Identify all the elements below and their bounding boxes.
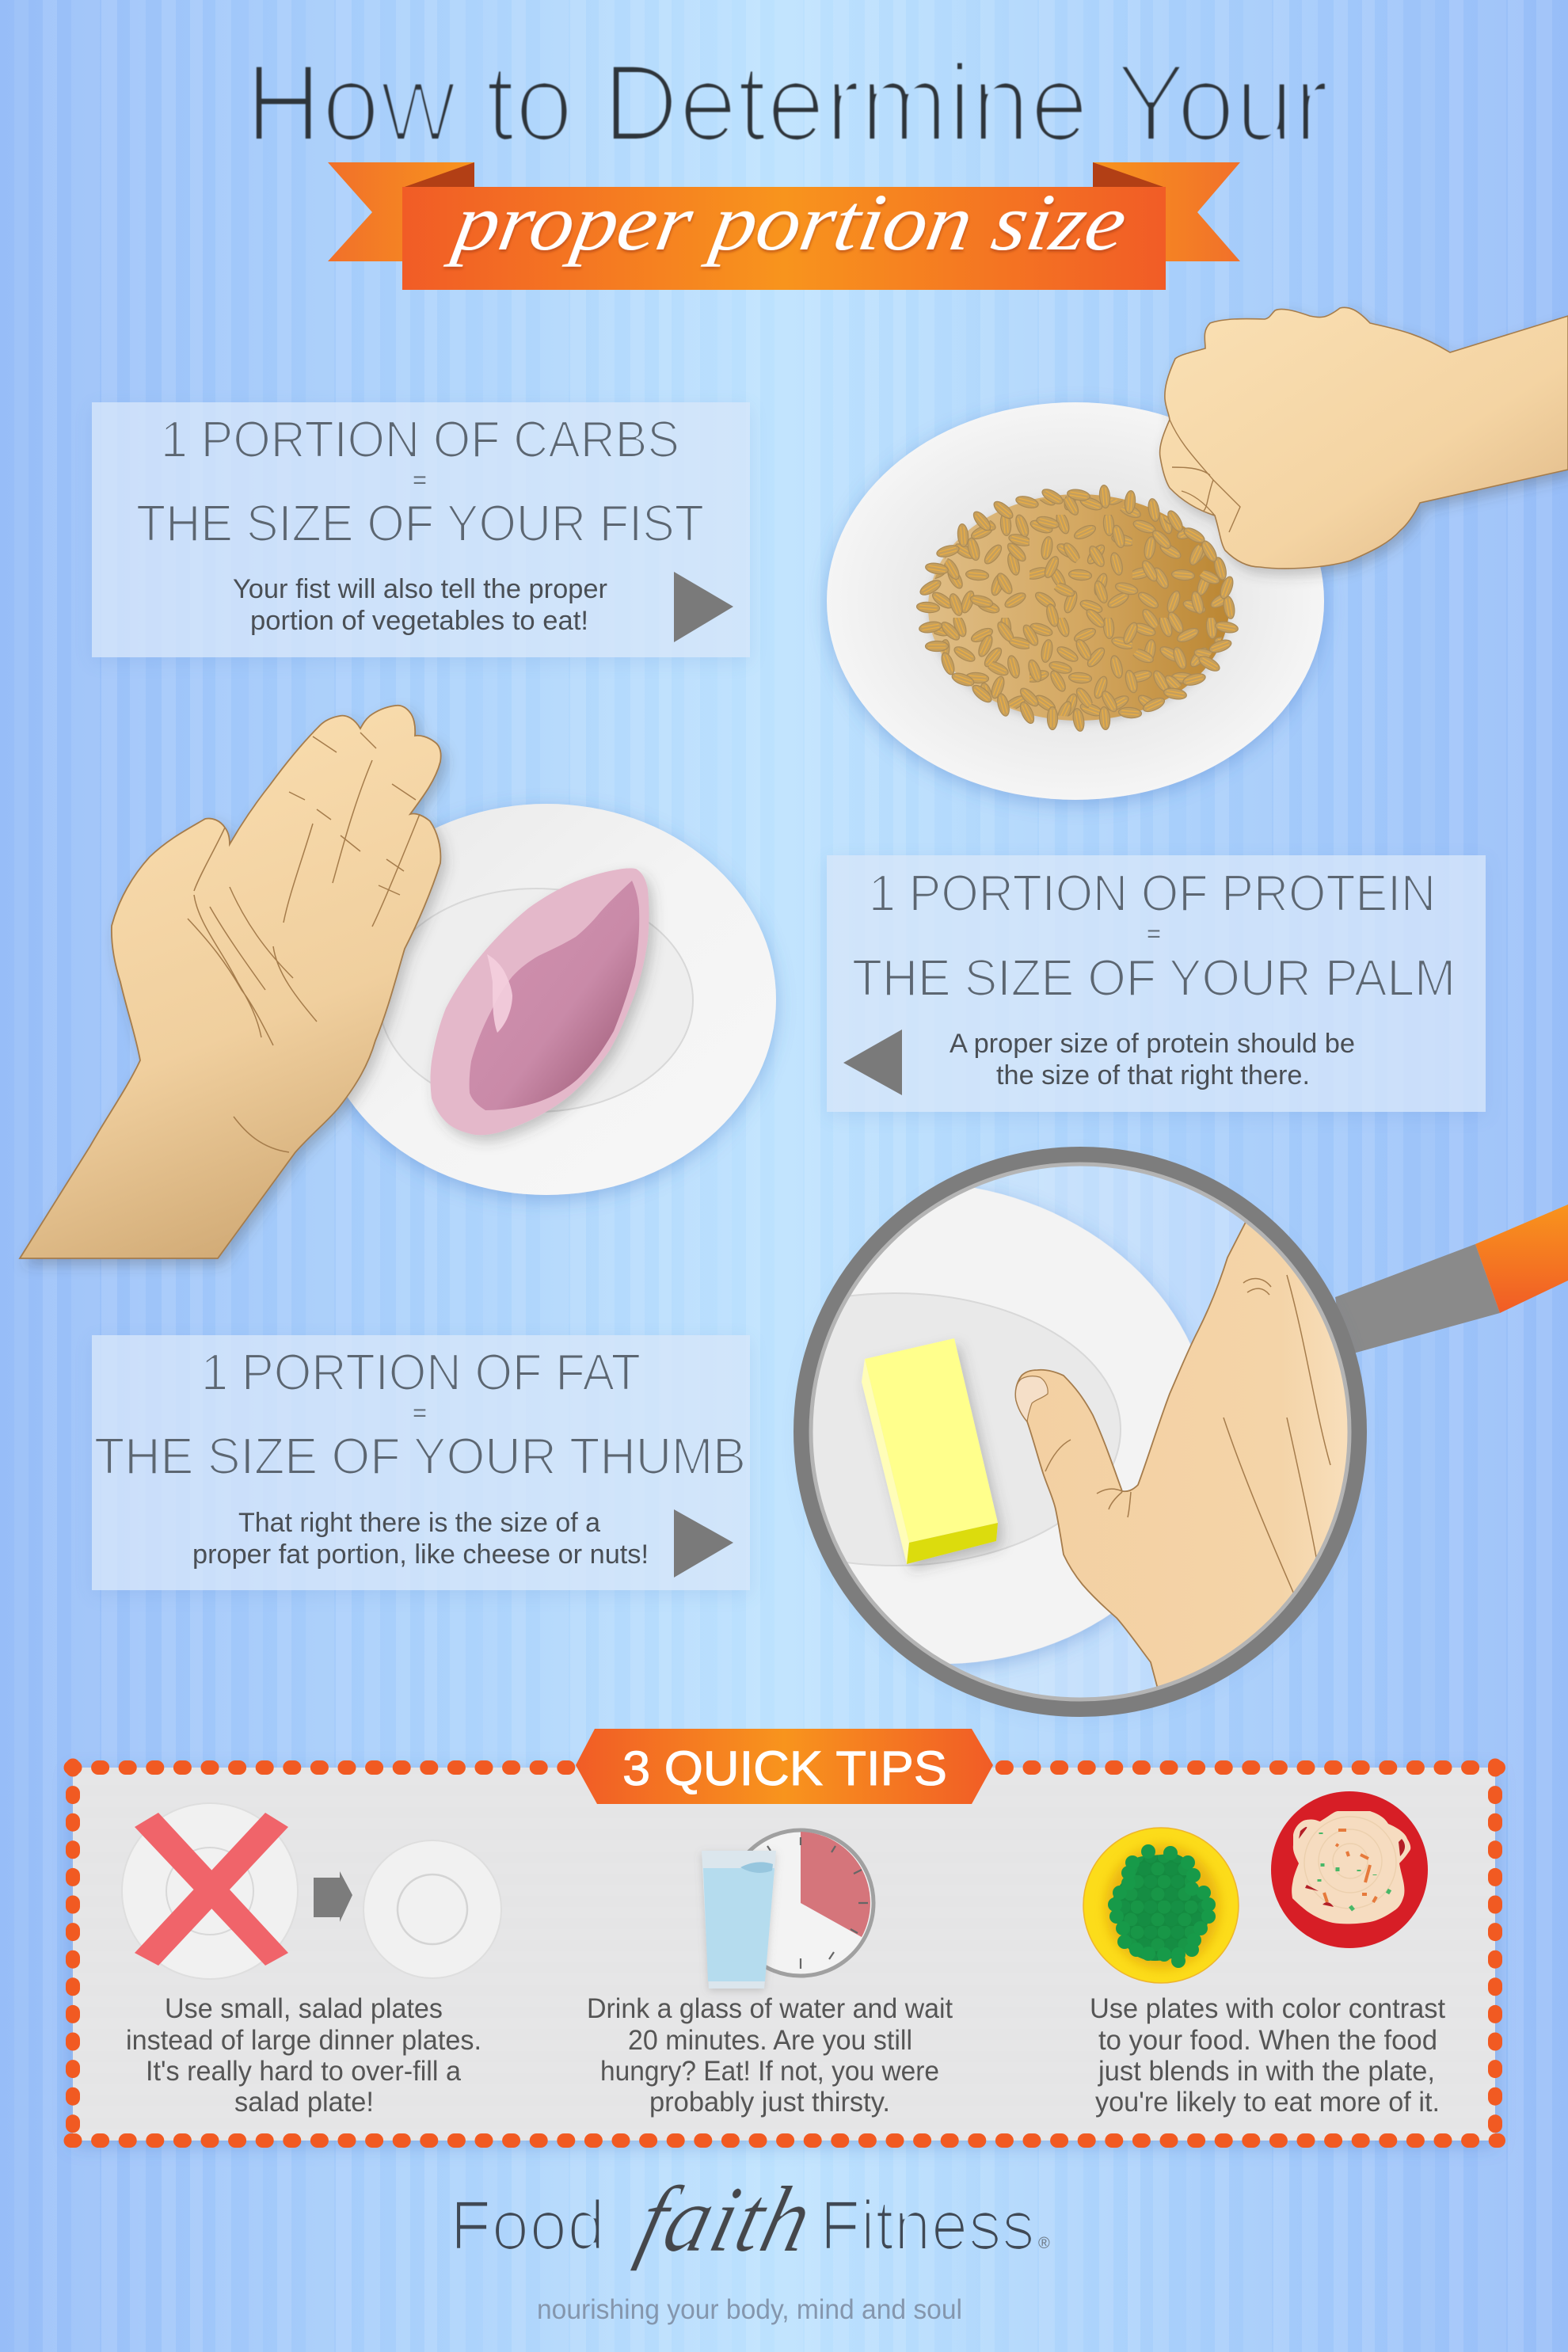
icon: red plate with pasta <box>1271 1791 1428 1948</box>
tip 3: colored plates <box>1083 1791 1445 2118</box>
magnifier handle <box>1335 1205 1568 1356</box>
tips background <box>73 1768 1495 2141</box>
panel: fat: 1 PORTION OF FAT <box>201 1343 641 1401</box>
butter <box>862 1338 998 1564</box>
footer logo: Fitness <box>820 2187 1035 2264</box>
panel: fat: THE SIZE OF YOUR THUMB <box>94 1427 746 1485</box>
hand: palm <box>20 706 441 1258</box>
footer logo: Food <box>450 2187 605 2264</box>
arrow: right <box>674 1509 733 1578</box>
tip 3 text: Use plates with color contrast <box>1090 1993 1445 2024</box>
panel: fat <box>92 1335 750 1590</box>
arrow: to small plate <box>314 1871 352 1922</box>
icon: large plate crossed out <box>122 1803 298 1979</box>
chicken breast <box>431 868 649 1135</box>
tip 2 text: probably just thirsty. <box>649 2087 890 2118</box>
panel: carbs <box>92 402 750 657</box>
panel: carbs: portion of vegetables to eat! <box>250 606 588 636</box>
hand: thumb <box>1015 1223 1348 1687</box>
banner: proper portion size <box>328 162 1240 290</box>
rice mound <box>916 485 1239 732</box>
panel: protein <box>827 855 1486 1112</box>
tip 1: small plates <box>122 1803 501 2118</box>
plate in lens <box>848 1185 1193 1677</box>
plate <box>827 402 1324 800</box>
panel: fat: proper fat portion, like cheese or nuts! <box>192 1539 649 1570</box>
dotted border <box>71 1766 1498 2143</box>
tip 2 text: Drink a glass of water and wait <box>587 1993 953 2024</box>
panel: 3 quick tips <box>71 1729 1498 2143</box>
rice plate <box>827 402 1324 800</box>
panel: carbs: THE SIZE OF YOUR FIST <box>136 494 704 552</box>
hand: fist <box>1160 307 1568 569</box>
title: How to Determine Your <box>245 43 1329 164</box>
magnifier ring <box>801 1155 1359 1709</box>
panel: carbs: = <box>413 467 427 493</box>
tip 2 text <box>587 1993 953 2118</box>
tip 1 text: It's really hard to over-fill a <box>146 2056 462 2087</box>
tip 2 text: hungry? Eat! If not, you were <box>600 2056 939 2087</box>
tagline: nourishing your body, mind and soul <box>537 2294 962 2325</box>
icon: clock <box>728 1830 873 1976</box>
tip 2 text: 20 minutes. Are you still <box>628 2025 912 2056</box>
tips heading tab <box>576 1729 993 1804</box>
arrow: right <box>674 572 733 642</box>
panel: protein: THE SIZE OF YOUR PALM <box>852 949 1456 1007</box>
tip 1 text: salad plate! <box>234 2087 374 2118</box>
tip 3 text: you're likely to eat more of it. <box>1095 2087 1440 2118</box>
footer logo: faith <box>629 2167 822 2271</box>
lens contents <box>813 1166 1348 1698</box>
icon: glass of water <box>702 1851 776 1989</box>
icon: yellow plate with peas <box>1083 1828 1239 1983</box>
footer logo <box>450 2167 1050 2271</box>
panel: carbs: 1 PORTION OF CARBS <box>161 410 679 468</box>
tips heading tab: 3 QUICK TIPS <box>622 1741 947 1795</box>
tip 2: water and clock <box>587 1830 953 2118</box>
magnifying glass <box>611 1146 1568 1742</box>
panel: protein: = <box>1147 921 1161 947</box>
panel: carbs: Your fist will also tell the proper <box>233 574 607 604</box>
panel: protein: 1 PORTION OF PROTEIN <box>869 864 1436 922</box>
panel: protein: A proper size of protein should be <box>950 1029 1355 1059</box>
footer logo: ® <box>1038 2235 1050 2252</box>
icon: small plate <box>363 1840 501 1978</box>
tip 1 text <box>126 1993 481 2118</box>
tip 1 text: instead of large dinner plates. <box>126 2025 481 2056</box>
tip 1 text: Use small, salad plates <box>165 1993 443 2024</box>
banner: proper portion size: proper portion size <box>442 178 1133 268</box>
plate: protein <box>317 804 776 1195</box>
tip 3 text: to your food. When the food <box>1098 2025 1437 2056</box>
panel: fat: = <box>413 1400 427 1426</box>
tip 3 text: just blends in with the plate, <box>1098 2056 1435 2087</box>
arrow: left <box>843 1029 902 1095</box>
tip 3 text <box>1090 1993 1445 2118</box>
panel: fat: That right there is the size of a <box>238 1508 600 1538</box>
panel: protein: the size of that right there. <box>996 1060 1310 1090</box>
